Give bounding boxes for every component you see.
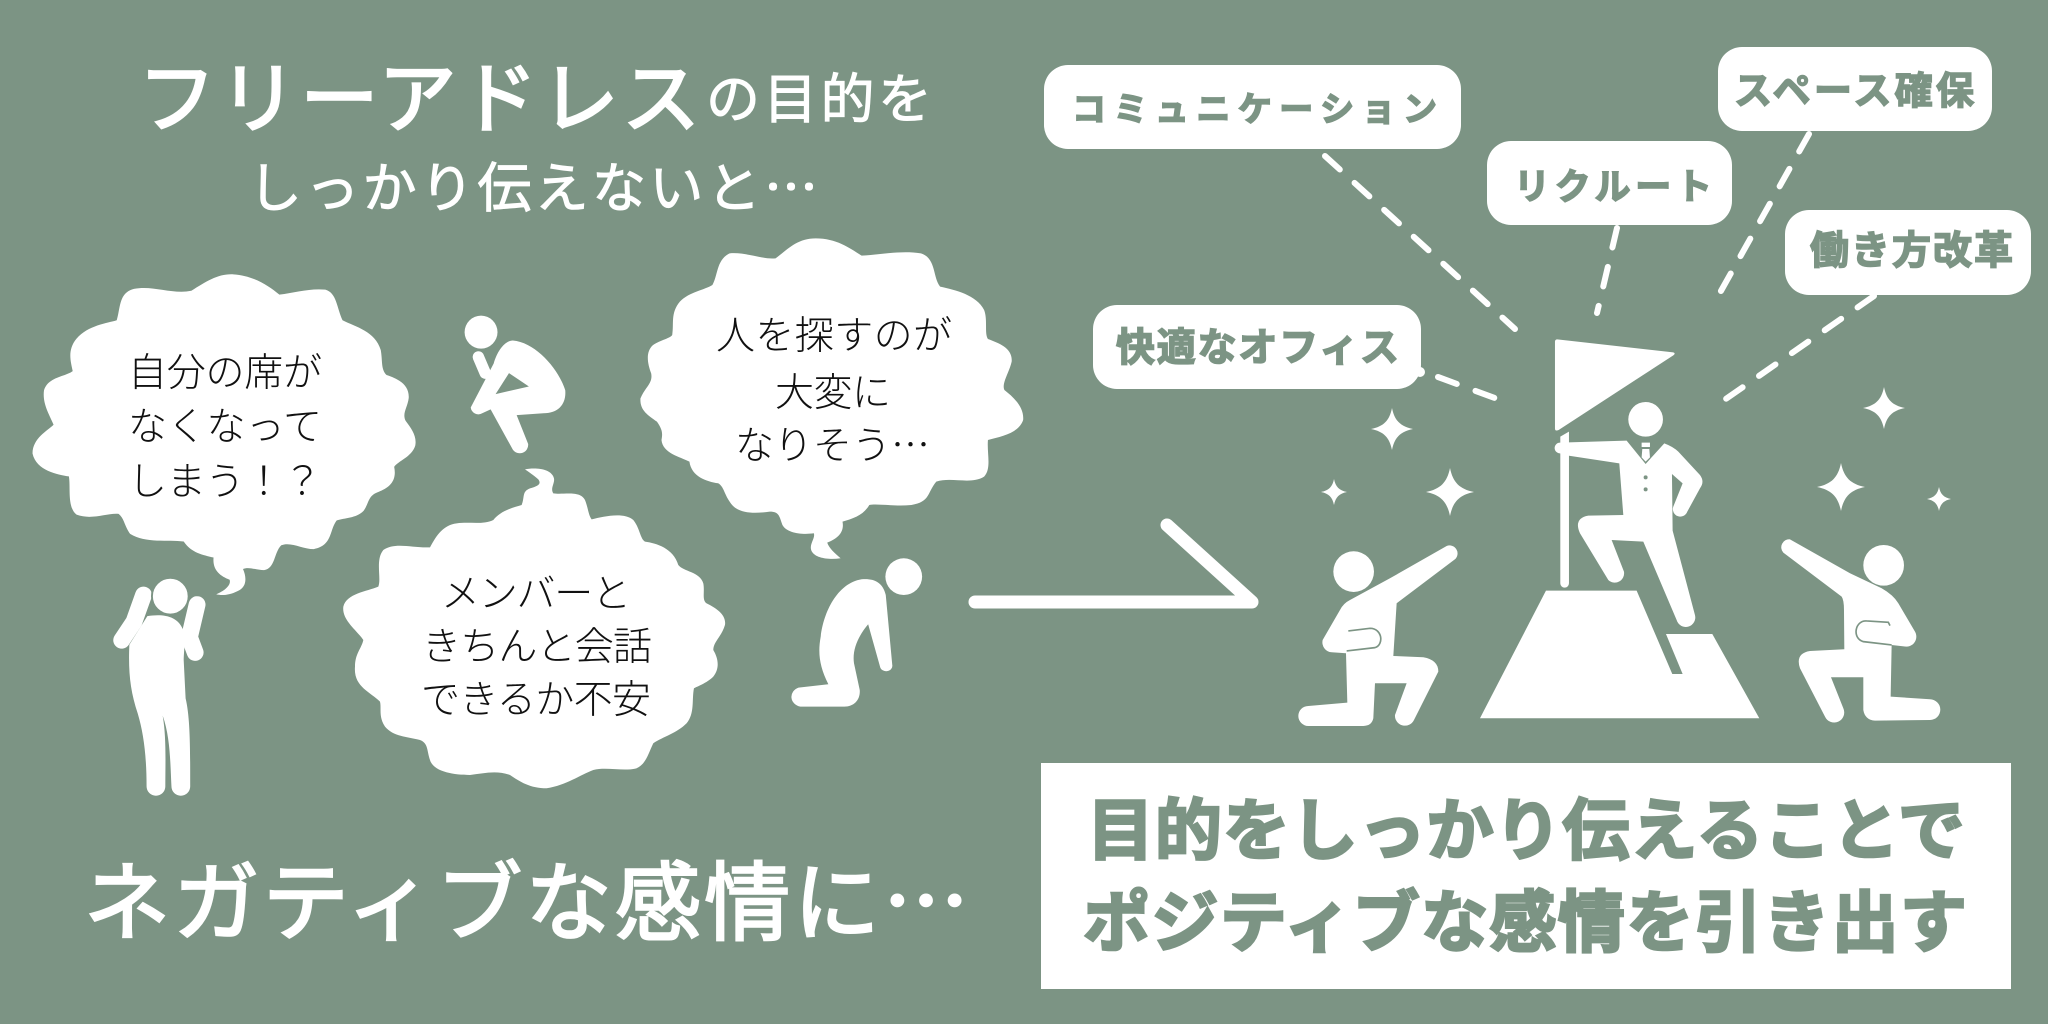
speech bubble: recruiting worry bbox=[640, 238, 1023, 559]
arrow bbox=[975, 525, 1252, 602]
speech bubble: seat worry: なくなって bbox=[128, 406, 322, 449]
icon: crouching person bbox=[465, 316, 565, 453]
speech bubble: conversation worry: メンバーと bbox=[441, 573, 631, 616]
label: recruit: リクルート bbox=[1514, 166, 1712, 207]
label: communication: コミュニケーション bbox=[1072, 91, 1437, 129]
flag pole bbox=[1560, 432, 1569, 588]
speech bubble: recruiting worry: 人を探すのが bbox=[716, 315, 952, 358]
mountain bbox=[1480, 591, 1759, 718]
panel: conclusion box: ポジティブな感情を引き出す bbox=[1083, 886, 1967, 961]
speech bubble: seat worry: 自分の席が bbox=[128, 352, 322, 395]
label: space: スペース確保 bbox=[1734, 71, 1974, 113]
title: top left heading: しっかり伝えないと… bbox=[248, 144, 818, 223]
icon: kneeling slumped person bbox=[791, 558, 922, 707]
label: work style reform bbox=[1785, 210, 2031, 295]
speech bubble: seat worry bbox=[33, 274, 416, 595]
label: work style reform: 働き方改革 bbox=[1810, 230, 2013, 273]
label: recruit bbox=[1487, 141, 1732, 225]
panel: conclusion box: 目的をしっかり伝えることで bbox=[1087, 794, 1965, 869]
title: top left heading: の目的を bbox=[706, 70, 932, 130]
flag bbox=[1555, 339, 1675, 431]
icon: sparkles right bbox=[1817, 387, 1951, 511]
speech bubble: conversation worry: できるか不安 bbox=[421, 679, 651, 722]
icon: kneeling person pointing left figure bbox=[1298, 545, 1458, 726]
head bbox=[1628, 402, 1663, 437]
panel: conclusion box bbox=[1041, 763, 2011, 989]
speech bubble: seat worry: しまう！？ bbox=[128, 461, 322, 504]
speech bubble: conversation worry bbox=[343, 468, 725, 788]
icon: sparkles left bbox=[1321, 408, 1474, 516]
icon: standing worried person bbox=[122, 578, 197, 796]
title: top left heading: フリーアドレス bbox=[138, 55, 700, 143]
label: space bbox=[1718, 47, 1992, 131]
speech bubble: recruiting worry: 大変に bbox=[775, 372, 891, 415]
label: communication bbox=[1044, 65, 1461, 149]
speech bubble: recruiting worry: なりそう… bbox=[735, 415, 930, 471]
title: top left heading bbox=[138, 55, 932, 223]
label: comfortable office: 快適なオフィス bbox=[1116, 327, 1399, 370]
heading: negative feelings: ネガティブな感情に… bbox=[84, 833, 969, 958]
speech bubble: conversation worry: きちんと会話 bbox=[422, 626, 652, 669]
dashed connectors bbox=[1325, 134, 1874, 403]
label: comfortable office bbox=[1093, 305, 1425, 389]
icon: kneeling person pointing right figure bbox=[1781, 539, 1940, 723]
person body bbox=[1555, 441, 1702, 627]
icon: flag and person on summit bbox=[1480, 339, 1759, 718]
